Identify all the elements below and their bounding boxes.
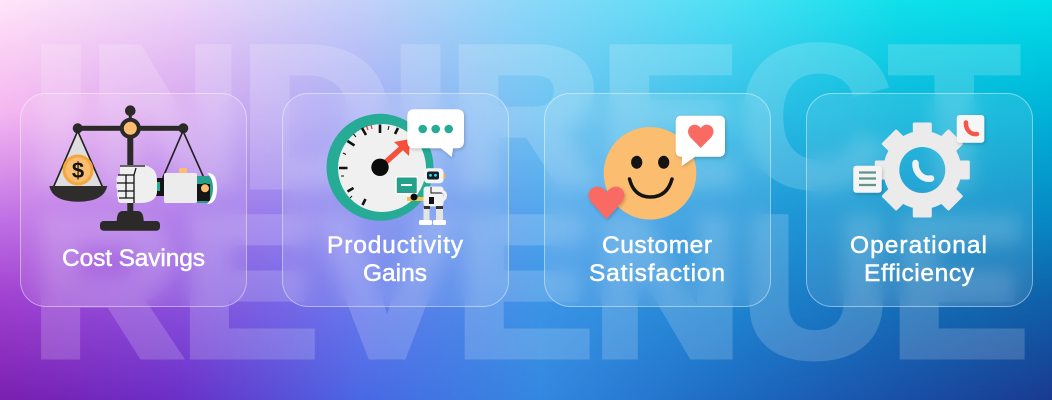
- phone badge: [957, 115, 984, 143]
- icons and labels layer: [49, 105, 987, 286]
- background headline: INDIRECT REVENUE: REVENUE: [32, 176, 1028, 397]
- robot figure: [396, 177, 418, 194]
- heart left: [588, 187, 624, 219]
- scale post and base: [73, 105, 188, 231]
- panel: productivity gains card: [282, 93, 509, 307]
- icon: speedometer, chat bubble and robot: [326, 109, 464, 225]
- gauge dial: [326, 114, 434, 221]
- icon: balance scale with robot fist: $: [72, 158, 84, 183]
- label: Customer Satisfaction: Customer: [602, 232, 712, 259]
- label: Productivity Gains: [327, 232, 464, 287]
- gauge needle: [380, 148, 402, 167]
- icon: gear with phone: [853, 115, 984, 218]
- label: Operational Efficiency: Efficiency: [864, 260, 975, 287]
- chat bubble with dots: [407, 109, 464, 157]
- label: Customer Satisfaction: Satisfaction: [589, 260, 725, 287]
- speech bubble with heart: [676, 116, 725, 166]
- label: Productivity Gains: Gains: [363, 260, 427, 287]
- label: Operational Efficiency: Operational: [850, 232, 987, 259]
- panel: cost savings card: [20, 93, 247, 307]
- panel: operational efficiency card: [806, 93, 1033, 307]
- right pan strings: [163, 131, 204, 178]
- document note: [853, 166, 882, 193]
- label: Cost Savings: Cost Savings: [62, 245, 205, 272]
- robot fist and arm: [179, 168, 187, 174]
- icon: smiley with hearts: [588, 116, 725, 220]
- background headline: INDIRECT REVENUE: INDIRECT: [32, 6, 1018, 227]
- left pan with coin: [54, 131, 102, 187]
- label: Operational Efficiency: [850, 232, 987, 287]
- label: Customer Satisfaction: [589, 232, 725, 287]
- label: Productivity Gains: Productivity: [327, 232, 464, 259]
- phone glyph: [915, 163, 931, 179]
- icon: balance scale with robot fist: [49, 105, 217, 231]
- panel: customer satisfaction card: [544, 93, 771, 307]
